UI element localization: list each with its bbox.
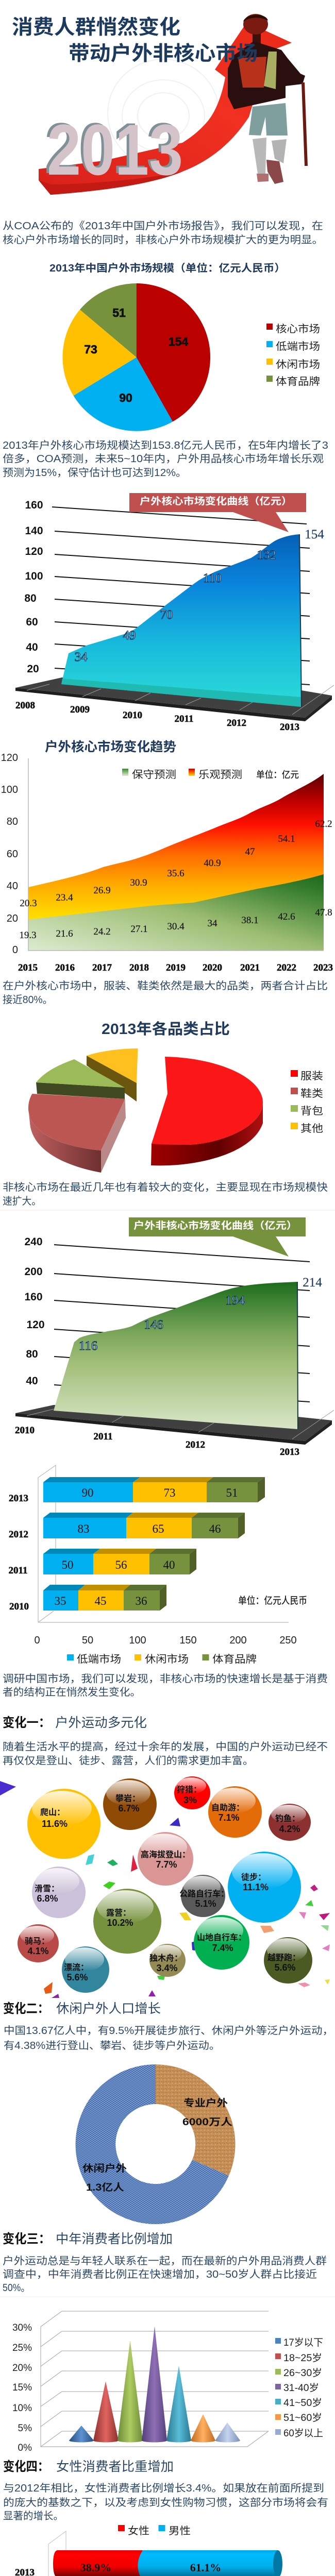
y axis: 20 [7, 913, 18, 924]
legend: 保守预测 [132, 769, 176, 781]
bar 2012: 83 [77, 1522, 90, 1535]
bubble: kayak 3.4: 3.4% [156, 1963, 178, 1973]
area chart: forecast [1, 752, 333, 973]
pie legend: 体育品牌 [276, 376, 320, 387]
legend: 51~60岁 [283, 2412, 322, 2424]
x axis years: 2023 [313, 962, 333, 973]
3D exploded pie [28, 1048, 323, 1173]
intro paragraph [3, 220, 323, 246]
bar 2012: 65 [153, 1522, 164, 1535]
legend: 26~30岁 [283, 2367, 322, 2379]
pie chart: market size: 51 [112, 306, 126, 319]
bubble: high altitude 7.7: 7.7% [156, 1859, 177, 1870]
year labels: 2011 [175, 714, 193, 724]
value labels: 132 [257, 548, 276, 562]
cone chart: age [12, 2311, 323, 2453]
bubble: trail running 5.6: 越野跑： [267, 1953, 300, 1962]
y axis: 120 [1, 752, 18, 764]
bar 2013 [53, 2550, 282, 2576]
pie chart: market size: 154 [169, 335, 188, 348]
y axis: 80 [7, 816, 18, 827]
y axis labels: 40 [26, 641, 38, 653]
heading: change three: 中年消费者比例增加 [56, 2232, 173, 2246]
walls and grid [62, 2311, 269, 2431]
y axis labels: 160 [24, 1291, 43, 1303]
conservative area [28, 874, 324, 951]
optimistic values: 47 [245, 846, 255, 857]
confetti [0, 1781, 330, 1998]
y axis labels: 80 [24, 592, 37, 604]
x axis years: 2019 [166, 962, 186, 973]
paragraph: change three: 调查中，中年消费者比例正在快速增加，30~50岁人群占比接近 [3, 2268, 317, 2280]
y axis labels: 200 [24, 1266, 43, 1278]
legend: 单位：亿元 [256, 769, 299, 780]
pie chart: market size: 73 [84, 343, 97, 356]
axis labels [12, 2323, 32, 2453]
legend: 41~50岁 [283, 2397, 322, 2409]
slice: shoes [28, 1094, 126, 1173]
area [54, 1282, 298, 1429]
bubble: trail running 5.6 [264, 1937, 312, 1984]
conservative values: 34 [207, 918, 217, 929]
bubble: mountain biking 7.4 [194, 1915, 249, 1970]
donut chart: 休闲户外 [82, 2162, 127, 2174]
value labels: 194 [225, 1294, 245, 1308]
y axis labels: 120 [25, 546, 43, 557]
bubble: mountain biking 7.4: 山地自行车： [197, 1933, 246, 1942]
optimistic values: 54.1 [278, 834, 295, 844]
bubble: rafting 5.6 [62, 1946, 109, 1993]
heading: change two: 休闲户外人口增长 [56, 2002, 161, 2016]
donut chart: 1.3亿人 [86, 2182, 124, 2193]
optimistic values: 26.9 [93, 885, 111, 896]
paragraph: categories: 在户外核心市场中，服装、鞋类依然是最大的品类，两者合计占比 [3, 980, 328, 992]
axis labels: 0% [18, 2443, 32, 2453]
bubble: hunting 3: 3% [183, 1795, 197, 1805]
axis labels: 30% [12, 2323, 32, 2333]
x axis years [18, 962, 333, 973]
value labels: 154 [305, 528, 324, 541]
bubble: climbing 6.7: 攀岩： [115, 1794, 140, 1803]
y axis labels [24, 1236, 45, 1387]
y axis labels: 60 [26, 616, 38, 628]
bar 2010: 36 [135, 1595, 147, 1607]
legend: 17岁以下 [283, 2337, 323, 2348]
bar 2012: 46 [209, 1522, 221, 1535]
unit note: 单位：亿元人民币 [238, 1595, 307, 1606]
y axis labels: 40 [26, 1375, 38, 1387]
callout: 户外核心市场变化曲线（亿元） [140, 495, 292, 507]
axis labels: 5% [18, 2423, 32, 2434]
optimistic values: 20.3 [20, 898, 37, 909]
legend: 其他 [300, 1123, 323, 1134]
bubble: horse riding 4.1: 4.1% [27, 1946, 49, 1956]
legend [291, 1070, 323, 1134]
bubble: rafting 5.6: 5.6% [66, 1972, 88, 1982]
paragraph: non-core: 非核心市场在最近几年也有着较大的变化，主要显现在市场规模快 [3, 1181, 328, 1193]
y axis labels: 80 [26, 1348, 38, 1360]
3D area chart: core market [15, 493, 334, 733]
bubble: skiing 6.8: 6.8% [37, 1893, 58, 1904]
year labels: 2010 [123, 710, 142, 721]
value labels: 146 [144, 1318, 163, 1332]
stacked 3D bar chart [9, 1465, 307, 1665]
bubble: skiing 6.8: 滑雪： [35, 1884, 59, 1893]
bubble: mountain biking 7.4: 7.4% [212, 1943, 233, 1953]
legend: 低端市场 [77, 1653, 121, 1665]
donut chart: 专业户外 [183, 2097, 228, 2109]
bar 2013: 51 [226, 1486, 238, 1499]
x axis [34, 1635, 297, 1646]
2013 number: 2013 [47, 109, 183, 190]
bubble: fishing 4.2 [269, 1804, 311, 1841]
bar 2012 [43, 1513, 245, 1538]
bubble: kayak 3.4: 独木舟： [149, 1954, 182, 1963]
watermark rings [108, 59, 219, 167]
grid lines [52, 507, 310, 685]
legend: 60岁以上 [283, 2428, 323, 2439]
year labels: 2013 [9, 1493, 28, 1504]
value labels: 110 [203, 571, 222, 585]
heading: change one: 户外运动多元化 [55, 1716, 147, 1730]
bubble: road cycling 5.1: 5.1% [195, 1899, 216, 1909]
bubble: horse riding 4.1 [18, 1924, 59, 1962]
optimistic values: 62.2 [315, 819, 332, 829]
axis labels: 10% [12, 2403, 32, 2414]
x axis: 50 [82, 1635, 93, 1646]
conservative values: 47.8 [315, 907, 332, 918]
bubble: hiking 11.1: 11.1% [243, 1882, 269, 1892]
x axis years: 2017 [92, 962, 112, 973]
legend: 背包 [300, 1105, 323, 1117]
heading: change four: 女性消费者比重增加 [56, 2460, 174, 2474]
optimistic values [20, 819, 332, 909]
bubble: fishing 4.2: 4.2% [279, 1824, 300, 1834]
x axis years: 2021 [240, 962, 260, 973]
donut chart [76, 2064, 236, 2224]
pie legend: 核心市场 [276, 323, 320, 335]
conservative values: 42.6 [278, 911, 295, 922]
pie legend [266, 323, 320, 387]
bar 2011: 40 [163, 1558, 175, 1571]
floor [15, 677, 334, 721]
x axis years: 2022 [277, 962, 296, 973]
intro paragraph: 核心户外市场增长的同时，非核心户外市场规模扩大的更为明显。 [3, 234, 323, 246]
bubble: kayak 3.4 [149, 1944, 186, 1977]
heading: change four [3, 2460, 174, 2474]
paragraph: change two [4, 2025, 333, 2052]
conservative values [19, 907, 332, 941]
paragraph: change two: 有4.38%进行登山、攀岩、徒步等户外运动。 [4, 2040, 220, 2052]
x axis: 250 [279, 1635, 297, 1646]
heading: change one [3, 1716, 147, 1730]
bar 2010: 45 [95, 1595, 106, 1607]
bubble: camping 10.2: 10.2% [107, 1918, 133, 1928]
bar 2011: 56 [115, 1558, 127, 1571]
pie legend: 休闲市场 [276, 359, 320, 370]
paragraph: change four [3, 2482, 328, 2522]
conservative values: 19.3 [19, 930, 37, 941]
axis labels: 25% [12, 2343, 32, 2353]
y axis: 60 [7, 849, 18, 860]
year labels: 2012 [227, 718, 246, 728]
cones [69, 2326, 240, 2443]
legend: 18~25岁 [283, 2352, 322, 2364]
x axis years: 2018 [129, 962, 149, 973]
bar 2010 [43, 1585, 166, 1611]
conservative values: 38.1 [241, 915, 259, 926]
hiker [228, 14, 308, 184]
bubble: high altitude 7.7: 高海拔登山： [141, 1850, 190, 1859]
bubble: hiking 11.1: 徒步： [241, 1872, 266, 1882]
bar 2013 [43, 1477, 265, 1502]
legend [67, 1653, 257, 1665]
bubble: self-guided 7.1: 7.1% [218, 1812, 240, 1823]
bubble chart: activities [0, 1776, 330, 1998]
hero illustration [39, 14, 308, 195]
optimistic values: 30.9 [130, 877, 147, 888]
year labels: 2010 [15, 1425, 35, 1436]
paragraph: change one: 随着生活水平的提高，经过十余年的发展，中国的户外运动已经不 [3, 1741, 328, 1753]
paragraph: core market growth: 预测为15%，保守估计也可达到12%。 [3, 467, 187, 479]
paragraph: consumer structure [3, 1673, 328, 1698]
year labels [15, 700, 299, 733]
intro paragraph: 从COA公布的《2013年中国户外市场报告》，我们可以发现，在 [3, 220, 323, 232]
legend: 服装 [300, 1070, 323, 1082]
y axis labels: 120 [26, 1319, 45, 1331]
paragraph: change three: 户外运动总是与年轻人联系在一起，而在最新的户外用品消费人群 [3, 2255, 327, 2267]
year labels: 2008 [15, 700, 35, 711]
paragraph: consumer structure: 调研中国市场，我们可以发现，非核心市场的快速增长是基于消费 [3, 1673, 328, 1685]
heading: change three: 变化三： [3, 2232, 51, 2246]
paragraph: categories [3, 980, 328, 1006]
paragraph: consumer structure: 者的结构正在悄然发生变化。 [3, 1686, 141, 1698]
bubble: horse riding 4.1: 骑马： [25, 1937, 49, 1946]
year labels: 2013 [280, 722, 299, 733]
conservative values: 21.6 [56, 928, 73, 939]
callout [129, 493, 306, 532]
frame [38, 1465, 289, 1622]
value labels: 49 [123, 629, 136, 642]
conservative values: 27.1 [130, 924, 148, 935]
paragraph: core market growth: 倍多，COA预测，未来5~10年内，户外用品核心市场年增长乐观 [3, 453, 324, 465]
paragraph: non-core [3, 1181, 328, 1207]
callout: 户外非核心市场变化曲线（亿元） [133, 1219, 297, 1231]
x axis: 0 [34, 1635, 40, 1646]
legend: 体育品牌 [212, 1653, 257, 1665]
conservative values: 24.2 [93, 926, 111, 937]
grid lines [54, 1245, 310, 1402]
paragraph: non-core: 速扩大。 [3, 1195, 41, 1207]
bubble: skiing 6.8 [32, 1867, 86, 1918]
legend [118, 2525, 191, 2537]
y axis labels: 160 [25, 499, 43, 511]
value labels: 116 [79, 1339, 97, 1353]
optimistic values: 40.9 [204, 858, 221, 869]
year labels: 2011 [94, 1431, 112, 1442]
paragraph: change three [3, 2255, 327, 2294]
paragraph: core market growth: 2013年户外核心市场规模达到153.8亿元人民币，在5年内增长了3 [3, 439, 328, 451]
y axis labels: 140 [25, 525, 43, 537]
bar 2010: 35 [55, 1595, 66, 1607]
bubble: fishing 4.2: 钓鱼： [275, 1814, 300, 1823]
year labels: 2009 [70, 704, 90, 715]
legend: 女性 [128, 2525, 149, 2537]
value labels: 70 [160, 608, 173, 622]
x axis: 150 [179, 1635, 197, 1646]
bubble: trail running 5.6: 5.6% [274, 1962, 296, 1973]
legend [275, 2337, 323, 2439]
category chart heading: 2013年各品类占比 [102, 1021, 230, 1038]
year labels: 2012 [186, 1439, 205, 1450]
year labels: 2010 [9, 1601, 29, 1612]
paragraph: change three: 50%。 [3, 2282, 30, 2294]
bubble: road cycling 5.1 [179, 1875, 229, 1917]
legend [122, 769, 299, 781]
value labels [74, 528, 324, 664]
title [12, 16, 258, 65]
bubble: camping 10.2: 露营： [106, 1908, 131, 1918]
bubble: camping 10.2 [93, 1889, 161, 1954]
bar 2013: 38.9% [80, 2561, 111, 2574]
legend: 乐观预测 [198, 769, 242, 781]
slice: other [87, 1048, 138, 1101]
year labels [15, 1425, 299, 1458]
bubble: mountaineering 11.6: 11.6% [42, 1819, 68, 1829]
bar 2013: 90 [81, 1486, 94, 1499]
x axis years: 2016 [55, 962, 75, 973]
bubble: hunting 3: 狩猎： [177, 1785, 202, 1794]
bubble: self-guided 7.1: 自助游： [211, 1803, 244, 1812]
legend: 31-40岁 [283, 2382, 319, 2394]
bubble: high altitude 7.7 [138, 1832, 193, 1886]
callout [129, 1217, 306, 1257]
optimistic values: 35.6 [167, 868, 185, 879]
bubble: self-guided 7.1 [208, 1786, 262, 1838]
slice: apparel [151, 1057, 263, 1165]
bubble: mountaineering 11.6 [27, 1789, 100, 1859]
value labels: 214 [303, 1276, 322, 1290]
paragraph: change two: 中国13.67亿人中，有9.5%开展徒步旅行、休闲户外等泛户外运动， [4, 2025, 333, 2037]
paragraph: change one: 再仅仅是登山、徒步、露营，人们的需求更加丰富。 [3, 1755, 254, 1767]
axis labels: 15% [12, 2382, 32, 2393]
area [61, 534, 301, 707]
heading: change four: 变化四： [3, 2460, 49, 2474]
bubble: rafting 5.6: 漂流： [64, 1962, 89, 1972]
trend chart heading: 户外核心市场变化趋势 [45, 740, 176, 754]
pie chart: market size: 90 [119, 391, 132, 404]
legend: 鞋类 [300, 1088, 323, 1099]
y axis labels: 100 [25, 570, 43, 582]
red growth arrow [39, 22, 292, 195]
conservative values: 30.4 [167, 921, 185, 932]
bubble: climbing 6.7 [103, 1778, 157, 1830]
y axis labels: 240 [24, 1236, 43, 1248]
bubble: hunting 3 [174, 1776, 210, 1809]
value labels: 34 [74, 650, 88, 664]
donut chart: 6000万人 [182, 2116, 232, 2128]
x axis years: 2015 [18, 962, 38, 973]
paragraph: change four: 显著的增长。 [3, 2510, 63, 2522]
year labels: 2012 [9, 1529, 28, 1540]
y axis: 0 [12, 944, 18, 956]
y axis: 40 [7, 880, 18, 892]
heading: change one: 变化一： [3, 1716, 51, 1730]
paragraph: core market growth [3, 439, 328, 479]
x axis years: 2020 [203, 962, 222, 973]
year labels [9, 1493, 29, 1612]
y axis labels: 20 [27, 663, 39, 675]
pie legend: 低端市场 [276, 341, 320, 352]
year labels: 2013 [280, 1447, 299, 1458]
heading: change two: 变化二： [3, 2002, 49, 2016]
pie chart heading: 2013年中国户外市场规模（单位：亿元人民币） [49, 262, 286, 274]
heading: change three [3, 2232, 173, 2246]
axis labels: 20% [12, 2363, 32, 2374]
bar 2013: 61.1% [190, 2561, 221, 2574]
year labels: 2011 [9, 1565, 27, 1576]
paragraph: change four: 与2012年相比，女性消费者比例增长3.4%。如果放在前面所提到 [3, 2482, 324, 2494]
title: 消费人群悄然变化 [12, 16, 180, 39]
x axis: 200 [229, 1635, 247, 1646]
bar 2011: 50 [62, 1558, 73, 1571]
y axis: 100 [1, 784, 18, 795]
paragraph: categories: 接近80%。 [3, 994, 53, 1006]
slice: backpack [36, 1059, 125, 1099]
bar 2013: 73 [164, 1486, 175, 1499]
heading: change two [3, 2002, 161, 2016]
paragraph: change four: 的庞大的基数之下，以及考虑到女性购物习惯，这部分市场将会有 [3, 2497, 328, 2509]
y axis labels [24, 499, 43, 675]
bubble: hiking 11.1 [228, 1852, 301, 1923]
optimistic values: 23.4 [56, 892, 73, 903]
x axis: 100 [129, 1635, 146, 1646]
value labels [79, 1276, 322, 1353]
floor [15, 1405, 334, 1445]
legend: 男性 [169, 2525, 191, 2537]
bubble: road cycling 5.1: 公路自行车： [179, 1889, 229, 1899]
2013 number: 2013 [44, 108, 180, 189]
y axis [1, 752, 18, 956]
bubble: climbing 6.7: 6.7% [118, 1803, 140, 1814]
paragraph: change one [3, 1741, 328, 1767]
3D area chart: non-core market [15, 1217, 334, 1458]
bar 2011 [43, 1549, 196, 1574]
optimistic area [28, 774, 324, 927]
pie chart: market size [62, 283, 210, 431]
title: 带动户外非核心市场 [69, 43, 258, 65]
bubble: mountaineering 11.6: 爬山： [40, 1808, 65, 1817]
frame [48, 2531, 66, 2576]
legend: 休闲市场 [145, 1653, 189, 1665]
gender chart [15, 2525, 282, 2576]
